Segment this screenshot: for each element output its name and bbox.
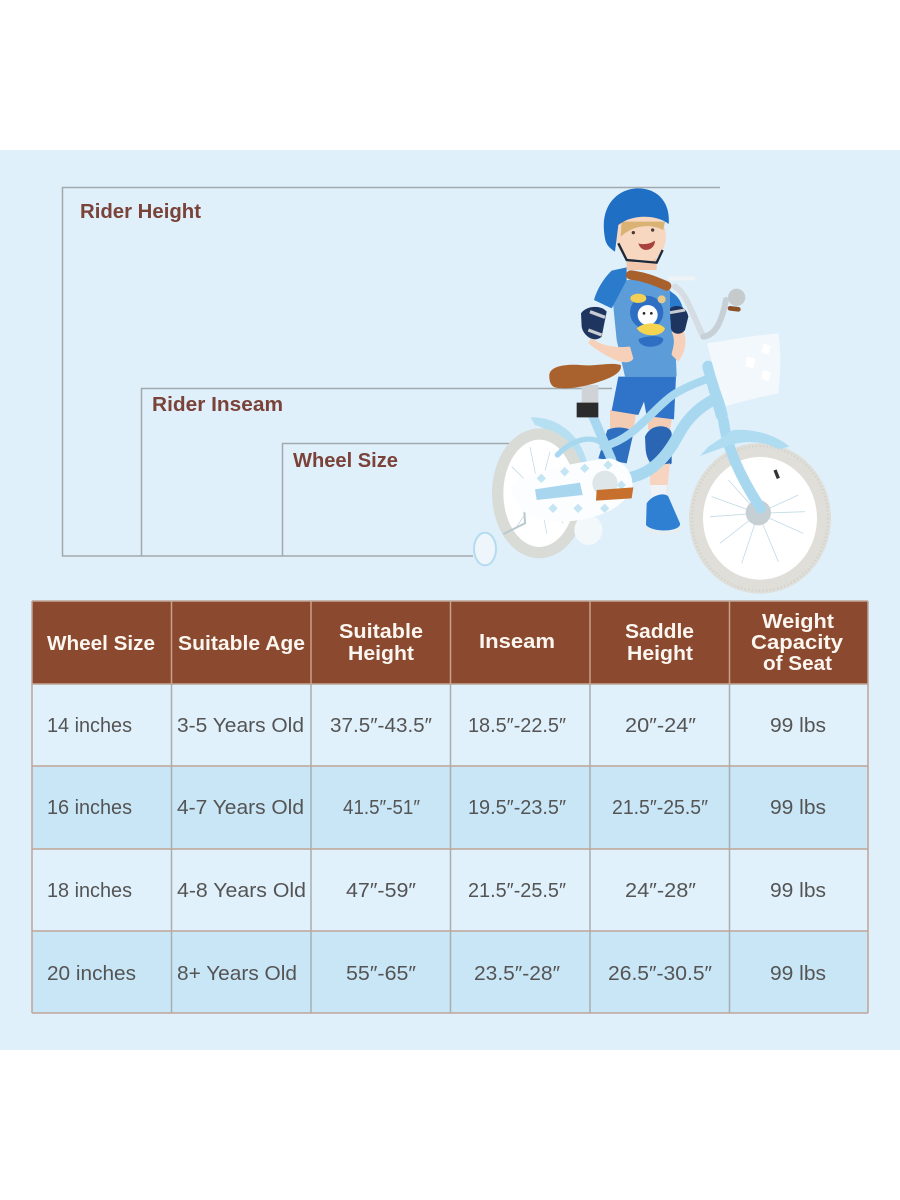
rear fender	[531, 417, 587, 467]
row: 14 inches: 14 inches	[47, 715, 132, 737]
row: 14 inches	[47, 715, 826, 737]
child legs and shoe	[598, 410, 681, 534]
child torso	[594, 267, 683, 377]
row: 16 inches: 16 inches	[47, 797, 132, 819]
row: 16 inches: 21.5″-25.5″	[612, 797, 708, 819]
saddle and seat post	[549, 364, 621, 417]
header labels: Suitable	[339, 621, 423, 643]
row: 14 inches: 20″-24″	[625, 715, 696, 737]
row: 20 inches	[47, 963, 826, 985]
row: 16 inches: 4-7 Years Old	[177, 797, 304, 819]
row: 16 inches: 41.5″-51″	[343, 797, 420, 819]
row: 16 inches: 99 lbs	[770, 797, 826, 819]
illustration: child standing with bicycle	[474, 188, 828, 591]
front basket	[707, 333, 780, 406]
row: 14 inches: 99 lbs	[770, 715, 826, 737]
row: 18 inches: 24″-28″	[625, 880, 696, 902]
row: 18 inches: 47″-59″	[346, 880, 416, 902]
table row: 14 inches background	[32, 684, 868, 766]
size guide frames	[62, 188, 720, 556]
row: 20 inches: 8+ Years Old	[177, 963, 297, 985]
front wheel	[692, 446, 828, 591]
row: 14 inches: 3-5 Years Old	[177, 715, 304, 737]
header labels: Inseam	[479, 631, 555, 653]
row: 16 inches	[47, 797, 826, 819]
background panel	[0, 150, 900, 1050]
front fender	[700, 430, 789, 456]
row: 20 inches: 99 lbs	[770, 963, 826, 985]
table row: 16 inches background	[32, 766, 868, 849]
rear wheel	[498, 434, 581, 553]
child shorts	[612, 377, 676, 419]
header labels: Weight	[762, 611, 834, 633]
header labels: Height	[627, 643, 693, 665]
label: Rider Height: Rider Height	[80, 201, 201, 223]
table row: 20 inches background	[32, 931, 868, 1013]
label: Rider Inseam: Rider Inseam	[152, 394, 283, 416]
row: 14 inches: 18.5″-22.5″	[468, 715, 566, 737]
header labels: of Seat	[763, 653, 832, 675]
row: 20 inches: 20 inches	[47, 963, 136, 985]
row: 18 inches: 99 lbs	[770, 880, 826, 902]
table header row	[32, 601, 868, 684]
table row: 18 inches background	[32, 849, 868, 931]
row: 20 inches: 26.5″-30.5″	[608, 963, 712, 985]
row: 16 inches: 19.5″-23.5″	[468, 797, 566, 819]
header labels: Saddle	[625, 621, 694, 643]
handlebar and grip	[631, 275, 745, 337]
chain guard with pedal	[510, 458, 633, 521]
row: 20 inches: 23.5″-28″	[474, 963, 560, 985]
label: Wheel Size: Wheel Size	[293, 450, 398, 472]
training wheel	[474, 492, 602, 565]
bicycle frame	[557, 367, 761, 508]
header labels: Height	[348, 643, 414, 665]
row: 18 inches: 4-8 Years Old	[177, 880, 306, 902]
row: 20 inches: 55″-65″	[346, 963, 416, 985]
header labels: Wheel Size	[47, 633, 155, 655]
header labels	[47, 611, 844, 675]
row: 18 inches	[47, 880, 826, 902]
child head with helmet	[604, 188, 669, 270]
child arms with elbow pads	[581, 306, 688, 362]
row: 14 inches: 37.5″-43.5″	[330, 715, 432, 737]
size table	[32, 601, 868, 1013]
header labels: Capacity	[751, 632, 844, 654]
row: 18 inches: 18 inches	[47, 880, 132, 902]
header labels: Suitable Age	[178, 633, 305, 655]
row: 18 inches: 21.5″-25.5″	[468, 880, 566, 902]
